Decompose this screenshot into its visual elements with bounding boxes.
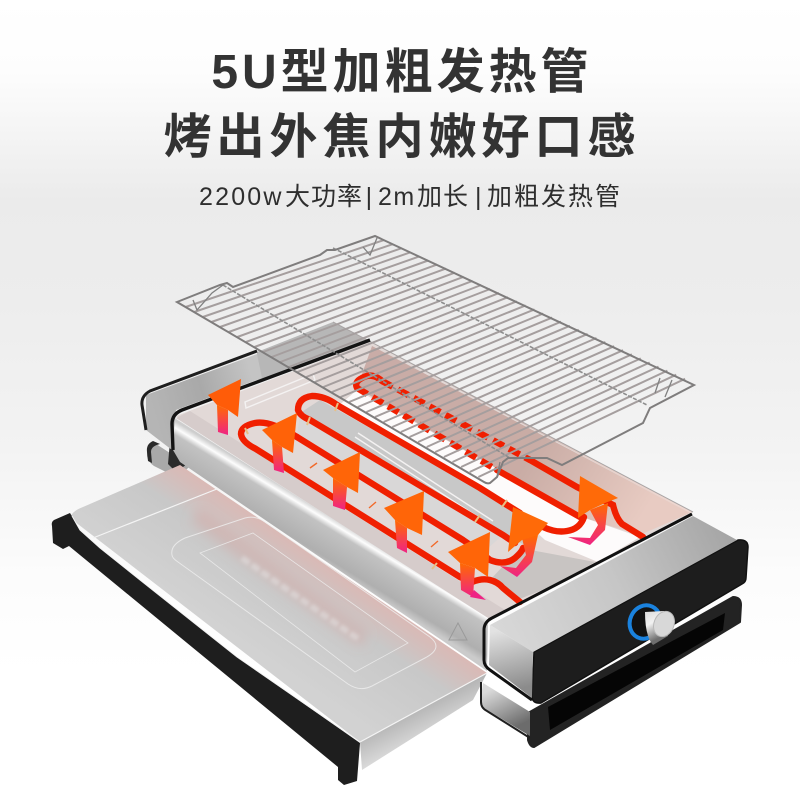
main body xyxy=(142,322,693,671)
lower unit window xyxy=(548,613,725,730)
heating tube xyxy=(241,376,643,602)
arrow 1 xyxy=(208,379,241,435)
rack cross wires xyxy=(186,240,685,477)
title line 2: 烤出外焦内嫩好口感 xyxy=(163,111,641,164)
inner floor slots xyxy=(245,374,493,525)
grey inner plate xyxy=(300,400,540,545)
tray embossed outer panel xyxy=(172,517,436,689)
tray black handle xyxy=(52,513,360,785)
subtitle: 加粗发热管 xyxy=(487,183,622,211)
cap black outline xyxy=(484,514,692,700)
dial blue ring xyxy=(624,600,666,644)
tray handle highlight xyxy=(72,516,360,742)
grill appliance xyxy=(52,236,748,785)
tray side wall xyxy=(360,673,487,770)
back wall band xyxy=(357,346,690,535)
tray heat glow xyxy=(195,515,365,640)
orange tube ticks xyxy=(310,463,438,547)
wire rack xyxy=(177,236,694,483)
arrow 7 xyxy=(568,476,618,545)
warning triangle xyxy=(449,623,467,640)
subtitle: 2200w xyxy=(199,183,284,211)
subtitle: 加长 xyxy=(417,183,469,211)
title line 1: 5U型加粗发热管 xyxy=(211,46,593,99)
subtitle: | xyxy=(366,183,372,211)
dial cylinder xyxy=(645,611,668,645)
cap side metal xyxy=(489,625,533,698)
subtitle: 大功率 xyxy=(285,183,363,211)
lower unit left end xyxy=(147,441,190,478)
lower right plate xyxy=(490,548,595,600)
subtitle: 2m xyxy=(378,183,416,211)
tray embossed inner panel xyxy=(200,533,408,672)
control panel xyxy=(532,540,748,703)
tray surface xyxy=(70,465,487,742)
rack long wires xyxy=(223,248,647,458)
tube clips xyxy=(245,403,507,569)
arrow 6 xyxy=(500,507,548,577)
rear rim line xyxy=(333,322,693,512)
rack outer frame xyxy=(177,236,694,483)
white floor band xyxy=(337,390,640,562)
right end cap xyxy=(484,514,748,703)
rear rail xyxy=(257,322,693,530)
arrow 3 xyxy=(323,452,360,510)
interior floor xyxy=(176,342,690,618)
dial xyxy=(624,600,678,645)
heat arrows xyxy=(208,379,618,600)
drip tray xyxy=(52,465,487,785)
subtitle: | xyxy=(475,183,482,211)
arrow 4 xyxy=(384,491,424,553)
tray embossed lettering xyxy=(242,558,360,640)
tray rim lines xyxy=(93,487,487,742)
cap top metal xyxy=(490,516,737,652)
lower unit right end xyxy=(481,597,741,747)
lower unit metal side xyxy=(481,683,530,736)
dial cap xyxy=(650,608,678,640)
lower unit black frame xyxy=(528,597,741,747)
arrow 2 xyxy=(262,413,297,473)
front rail xyxy=(173,417,488,671)
arrow 5 xyxy=(448,532,490,600)
front inner lip xyxy=(176,411,505,619)
pale inner plate xyxy=(297,413,503,555)
rack corner braces xyxy=(193,238,672,477)
left end cap xyxy=(142,340,370,450)
